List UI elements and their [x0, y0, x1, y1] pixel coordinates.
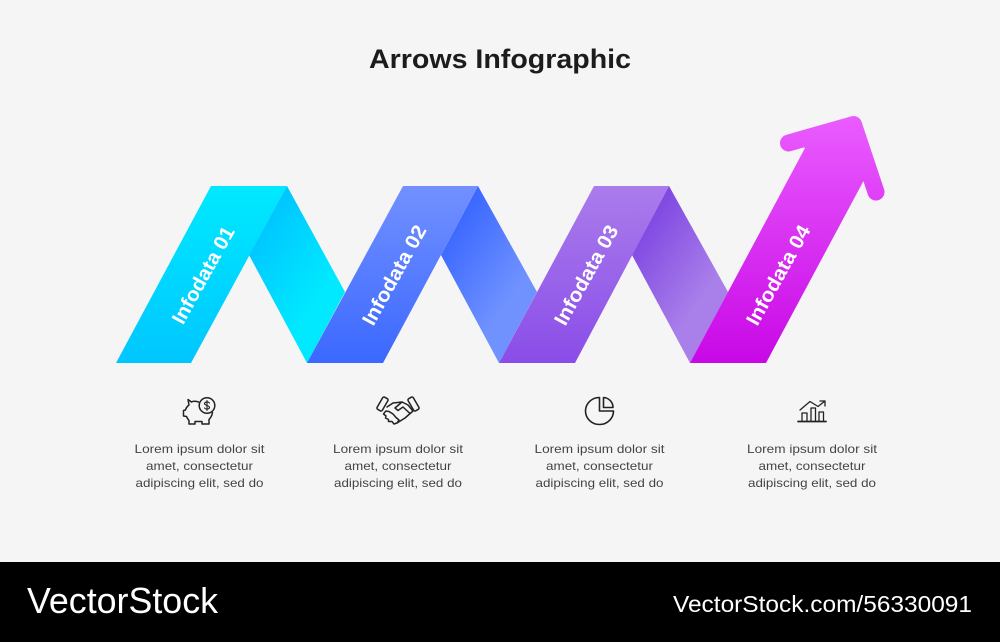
band 2: Infodata 02: [358, 222, 431, 329]
text block 1: [134, 442, 265, 490]
text block 4: adipiscing elit, sed do: [748, 476, 876, 490]
band 1: [116, 186, 287, 363]
icon: handshake: [376, 396, 420, 424]
text block 4: [747, 442, 878, 490]
text block 3: adipiscing elit, sed do: [536, 476, 664, 490]
icon: pie chart: [586, 398, 614, 424]
band 3: [499, 186, 669, 363]
band 1: Infodata 01: [168, 223, 240, 328]
text block 4: amet, consectetur: [758, 459, 866, 473]
text block 3: Lorem ipsum dolor sit: [534, 442, 665, 456]
footer url: VectorStock.com/56330091: [673, 591, 972, 617]
fold 1: [249, 186, 345, 363]
fold 3: [632, 186, 728, 363]
icon: growth chart: [798, 401, 826, 422]
text block 2: Lorem ipsum dolor sit: [333, 442, 464, 456]
band 4 with arrowhead: Infodata 04: [742, 221, 816, 329]
icon: piggy bank: [184, 398, 215, 424]
title: Arrows Infographic: [369, 44, 631, 74]
text block 1: adipiscing elit, sed do: [136, 476, 264, 490]
footer logo: VectorStock: [27, 580, 219, 621]
text block 3: amet, consectetur: [546, 459, 653, 473]
text block 2: adipiscing elit, sed do: [334, 476, 462, 490]
band 3: Infodata 03: [550, 222, 623, 329]
text block 1: Lorem ipsum dolor sit: [134, 442, 265, 456]
zigzag arrow: [116, 124, 876, 363]
fold 2: [441, 186, 537, 363]
band 4 with arrowhead: [690, 124, 876, 363]
text block 1: amet, consectetur: [146, 459, 253, 473]
text block 2: amet, consectetur: [344, 459, 452, 473]
text block 2: [333, 442, 464, 490]
text block 4: Lorem ipsum dolor sit: [747, 442, 878, 456]
band 2: [307, 186, 478, 363]
text block 3: [534, 442, 665, 490]
footer bar: [0, 562, 1000, 642]
